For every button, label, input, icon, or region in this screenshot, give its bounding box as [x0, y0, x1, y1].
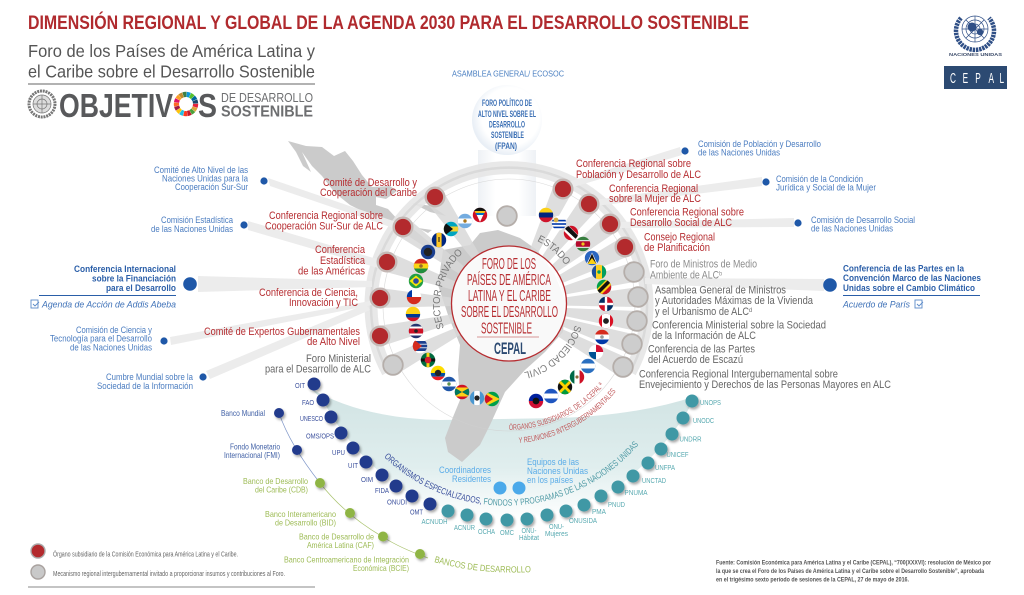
central circle: Foro: SOBRE EL DESARROLLO [461, 304, 558, 321]
right labels: gray: Conferencia de las Partes [648, 344, 755, 356]
central circle: Foro: FORO DE LOS [482, 256, 536, 273]
bank dots [274, 408, 425, 559]
bank labels: Económica (BCIE) [353, 563, 409, 573]
left labels: UN bodies: de las Naciones Unidas [70, 342, 153, 352]
Funds and programmes labels: ONU- [549, 522, 564, 531]
Funds and programmes labels: ACNUDH [422, 517, 448, 526]
right labels: red: Población y Desarrollo de ALC [576, 169, 701, 181]
connector tube to FPAN [478, 150, 536, 216]
bank labels: Banco Mundial [221, 408, 265, 418]
source note: en el trigésimo sexto período de sesiones de la CEPAL, 27 de mayo de 2016. [716, 576, 909, 584]
curved label: Sector privado: SECTOR PRIVADO [433, 250, 462, 330]
FPAN circle [472, 85, 542, 155]
right labels: gray: Conferencia Regional Intergubernamental sobre [639, 368, 838, 380]
outer spokes to UN bodies [170, 147, 824, 379]
flag: Venezuela [538, 208, 554, 222]
Specialised agency labels: OIT [295, 381, 305, 390]
Funds and programmes labels: PMA [592, 507, 607, 516]
Funds and programmes labels: ONUSIDA [569, 516, 598, 525]
flag: Argentina [458, 214, 472, 228]
right labels: UN bodies: Comisión de la Condición [776, 174, 863, 184]
right labels: red: sobre la Mujer de ALC [609, 193, 701, 205]
Funds and programmes labels: ONU- [522, 526, 537, 535]
right labels: gray: Ambiente de ALC [650, 270, 736, 282]
right labels: gray [639, 258, 891, 391]
left labels: red: Cooperación Sur-Sur de ALC [265, 220, 383, 232]
flag: Belice [420, 244, 436, 260]
Coordinadores Residentes: Coordinadores [439, 465, 491, 476]
right labels: gray: d [749, 307, 752, 314]
left labels: UN bodies: de las Naciones Unidas [151, 224, 234, 234]
Specialised agency labels: UPU [332, 448, 345, 457]
left labels: red: Conferencia de Ciencia, [259, 287, 358, 299]
Funds and programmes labels: UNOPS [700, 398, 721, 407]
right labels: gray: y Autoridades Máximas de la Vivienda [655, 295, 814, 307]
callout: Cambio Climático: Unidas sobre el Cambio Climático [843, 283, 975, 294]
left label: Foro Ministerial: para el Desarrollo de ALC [265, 364, 371, 376]
bank labels: del Caribe (CDB) [255, 484, 308, 494]
left labels: red: Cooperación del Caribe [320, 187, 417, 199]
right labels: UN bodies: de las Naciones Unidas [811, 224, 894, 234]
title: DIMENSIÓN REGIONAL Y GLOBAL DE LA AGENDA 2030 PARA EL DESARROLLO SOSTENIBLE [28, 10, 749, 34]
left labels: red: Innovación y TIC [289, 297, 358, 309]
logo: Objetivos de Desarrollo Sostenible [29, 87, 313, 124]
left label: Foro Ministerial: Foro Ministerial [306, 353, 371, 365]
left labels: UN bodies: Comisión Estadística [161, 215, 233, 225]
Funds and programmes labels: UNODC [693, 416, 714, 425]
right labels: red [576, 158, 744, 254]
flag: Perú [598, 314, 614, 328]
Funds and programmes labels: PNUMA [624, 488, 648, 497]
flag: Trinidad y Tabago [564, 226, 578, 240]
left label: Foro Ministerial [265, 353, 371, 376]
right labels: UN bodies [698, 139, 915, 234]
Funds and programmes labels: OCHA [478, 527, 496, 536]
Funds and programmes labels [422, 398, 721, 542]
flag: Guyana [484, 392, 500, 406]
flag: Suriname [576, 236, 590, 252]
Equipos de las Naciones Unidas: Naciones Unidas [527, 466, 588, 477]
bank labels: Fondo Monetario [230, 442, 280, 452]
central circle: Foro [452, 246, 566, 361]
inner spokes to central forum [379, 183, 639, 376]
right labels: red: Conferencia Regional sobre [576, 158, 691, 170]
flag: Guatemala [470, 390, 484, 406]
left labels: red: de Alto Nivel [307, 336, 360, 348]
Funds and programmes labels: Hábitat [519, 533, 540, 542]
left labels: UN bodies: Cumbre Mundial sobre la [106, 372, 193, 382]
Specialised agency labels: FIDA [375, 486, 390, 495]
bank labels: Banco Interamericano [265, 509, 336, 519]
bank labels: Banco de Desarrollo [243, 476, 308, 486]
left labels: red: Estadística [320, 255, 366, 267]
Funds and programmes labels: UNDRR [680, 434, 702, 444]
logo: Objetivos de Desarrollo Sostenible: S [198, 87, 217, 124]
bank labels: América Latina (CAF) [307, 540, 374, 550]
flag: El Salvador [442, 376, 456, 392]
Coordinadores Residentes: Residentes [452, 474, 491, 485]
callout: Financiación para el Desarrollo: para el Desarrollo [106, 283, 176, 294]
right labels: gray: Envejecimiento y Derechos de las Personas Mayores en ALC [639, 379, 891, 391]
flag: Dominica [420, 352, 436, 368]
flag: Bolivia [414, 258, 428, 274]
central circle: Foro: SOSTENIBLE [481, 320, 532, 338]
bank labels: Banco de Desarrollo de [299, 532, 374, 542]
Funds and programmes labels: UNCTAD [642, 476, 666, 485]
Funds and programmes labels: UNICEF [666, 450, 689, 459]
flag: Bahamas [444, 222, 458, 236]
icon: document check [31, 300, 39, 308]
FPAN circle: ALTO NIVEL SOBRE EL [478, 109, 536, 120]
flag: Brasil [408, 274, 424, 288]
Specialised agency labels: OMT [410, 508, 423, 516]
central circle: Foro: LATINA Y EL CARIBE [468, 288, 551, 305]
Coordinadores Residentes [439, 465, 506, 494]
left labels: red: Comité de Expertos Gubernamentales [204, 326, 360, 338]
flag: Honduras [544, 388, 558, 404]
central circle: Foro: CEPAL [494, 339, 526, 358]
logo: Naciones Unidas: NACIONES UNIDAS [949, 52, 1002, 57]
map: Latin America and the Caribbean [288, 141, 565, 462]
left labels: red [204, 177, 417, 348]
flags ring: member countries [405, 207, 614, 409]
flag: Chile [406, 290, 422, 304]
flag: Uruguay [552, 216, 566, 230]
Specialised agency labels: FAO [302, 398, 314, 407]
subtitle: Foro de los Países de América Latina y [28, 41, 315, 61]
callout: Cambio Climático: Acuerdo de París [842, 300, 910, 310]
left labels: UN bodies: Cooperación Sur-Sur [175, 182, 248, 192]
left labels: UN bodies: Tecnología para el Desarrollo [50, 334, 152, 344]
bank labels: de Desarrollo (BID) [275, 518, 336, 528]
curved label: Sociedad civil: SOCIEDAD CIVIL [524, 326, 581, 378]
flag: San Vicente y las Granadinas [592, 264, 606, 280]
Funds and programmes: teal dots [442, 394, 698, 526]
right labels: gray: de la Información de ALC [652, 330, 756, 342]
FPAN circle: (FPAN) [495, 141, 517, 152]
flag: Barbados [432, 232, 446, 248]
band: light teal backdrop [310, 388, 696, 520]
Specialised agency labels: ONUDI [387, 498, 407, 506]
left labels: red: de las Américas [298, 266, 365, 278]
callout: Financiación para el Desarrollo: Conferencia Internacional [74, 264, 176, 275]
right labels: gray: y el Urbanismo de ALC [655, 306, 768, 318]
subtitle [28, 41, 315, 82]
flag: Panamá [588, 344, 604, 360]
flag: Paraguay [594, 330, 610, 344]
flag: Santa Lucía [584, 250, 600, 266]
flag: Colombia [406, 306, 420, 322]
Equipos de las Naciones Unidas: Equipos de las [527, 457, 579, 468]
callout: Cambio Climático: Conferencia de las Partes en la [843, 264, 965, 274]
Specialised agency labels [295, 381, 423, 516]
logo: CEPAL [944, 66, 1007, 89]
flag: Haití [528, 394, 544, 408]
Specialised agency labels: UNESCO [300, 414, 323, 423]
flag: Saint Kitts y Nevis [596, 280, 612, 294]
bank labels: Internacional (FMI) [224, 450, 280, 460]
flag: Nicaragua [580, 358, 596, 374]
curved label: Bancos de desarrollo: BANCOS DE DESARROLLO [434, 556, 530, 573]
flag: Costa Rica [408, 324, 424, 338]
callout: Financiación para el Desarrollo: sobre la Financiación [92, 274, 176, 284]
Specialised agency labels: UIT [348, 461, 358, 470]
callout: Financiación para el Desarrollo: Agenda de Acción de Addis Abeba [41, 300, 176, 310]
right labels: gray: b [719, 270, 722, 278]
development banks arc [279, 413, 428, 558]
curved label: Reuniones intergubernamentales: Y REUNIONES INTERGUBERNAMENTALES [518, 388, 616, 443]
Specialised agencies: navy dots [308, 378, 436, 510]
flag: Antigua y Barbuda [472, 208, 488, 222]
right labels: gray: Asamblea General de Ministros [655, 284, 786, 296]
curved label: Órganos subsidiarios: ÓRGANOS SUBSIDIARIOS, DE LA CEPAL ª [509, 382, 602, 430]
left labels: UN bodies: Comisión de Ciencia y [76, 325, 153, 335]
Specialised agency labels: OIM [361, 475, 373, 484]
flag: México [570, 370, 584, 384]
flag: Jamaica [558, 380, 572, 394]
legend [31, 544, 285, 579]
outer ring band [371, 168, 647, 431]
curved label: Estado: ESTADO [538, 235, 570, 264]
logo: CEPAL: CEPAL [950, 69, 1004, 87]
FPAN circle: FORO POLÍTICO DE [482, 98, 532, 109]
flag: Granada [454, 384, 470, 400]
callout: Financiación para el Desarrollo [31, 264, 176, 310]
legend: Órgano subsidiario de la Comisión Económica para América Latina y el Caribe. [53, 550, 238, 558]
right labels: red: Desarrollo Social de ALC [630, 217, 732, 229]
Funds and programmes labels: PNUD [608, 500, 625, 509]
Equipos de las Naciones Unidas [512, 457, 588, 494]
right labels: gray: Conferencia Ministerial sobre la Sociedad [652, 320, 826, 332]
red subsidiary nodes [371, 180, 634, 345]
subtitle: el Caribe sobre el Desarrollo Sostenible [28, 62, 315, 82]
flag: Cuba [412, 340, 428, 354]
Funds and programmes labels: ACNUR [454, 523, 475, 532]
Specialised agency labels: OMS/OPS [306, 432, 334, 440]
Equipos de las Naciones Unidas: en los países [527, 475, 573, 486]
Funds and programmes labels: UNFPA [655, 463, 676, 472]
left labels: red: Comité de Desarrollo y [323, 177, 417, 189]
FPAN circle: DESARROLLO [489, 120, 525, 130]
curved label: Organismos especializados, fondos y programas: ORGANISMOS ESPECIALIZADOS, FONDOS Y PROGRAMAS DE LAS NACIONES UNIDAS [385, 441, 638, 506]
right labels: UN bodies: de las Naciones Unidas [698, 148, 781, 158]
source note [716, 560, 991, 584]
bank labels: Banco Centroamericano de Integración [284, 554, 409, 564]
left labels: UN bodies: Comité de Alto Nivel de las [154, 165, 249, 175]
flag: Ecuador [430, 366, 446, 380]
left labels: UN bodies: Naciones Unidas para la [162, 174, 248, 184]
left labels: UN bodies: Sociedad de la Información [97, 381, 193, 391]
logo: Objetivos de Desarrollo Sostenible: SOSTENIBLE [221, 104, 313, 120]
logo: Naciones Unidas [949, 16, 1002, 57]
gray intergovernmental nodes [383, 206, 648, 377]
bank labels [221, 408, 409, 573]
left labels: red: Conferencia Regional sobre [269, 210, 383, 222]
right labels: gray: Foro de Ministros de Medio [650, 258, 757, 270]
left labels: red: Conferencia [315, 244, 366, 256]
logo: Objetivos de Desarrollo Sostenible: OBJETIV [59, 87, 173, 124]
FPAN circle: SOSTENIBLE [491, 130, 524, 141]
central circle: Foro: PAÍSES DE AMÉRICA [467, 272, 551, 289]
UN body dots [160, 147, 837, 381]
left labels: UN bodies [50, 165, 249, 391]
right labels: red: Conferencia Regional [609, 183, 698, 195]
right labels: UN bodies: Comisión de Desarrollo Social [811, 215, 915, 225]
icon: document check [915, 300, 923, 308]
Funds and programmes labels: OMC [500, 528, 514, 537]
Funds and programmes labels: Mujeres [545, 529, 568, 538]
callout: Cambio Climático: Convención Marco de las Naciones [843, 273, 981, 284]
logo: Objetivos de Desarrollo Sostenible: DE DESARROLLO [221, 91, 313, 105]
icon: UN emblem small [29, 91, 55, 117]
right labels: UN bodies: Comisión de Población y Desarrollo [698, 139, 821, 149]
legend: Mecanismo regional intergubernamental invitado a proporcionar insumos y contribuciones al Foro. [53, 569, 285, 578]
right labels: red: Conferencia Regional sobre [630, 206, 744, 218]
right labels: red: Consejo Regional [644, 232, 715, 244]
right labels: red: de Planificación [644, 242, 710, 254]
callout: Cambio Climático [842, 264, 981, 310]
flag: República Dominicana [598, 296, 614, 312]
right labels: UN bodies: Jurídica y Social de la Mujer [776, 182, 876, 192]
right labels: gray: del Acuerdo de Escazú [648, 354, 743, 366]
label: Asamblea General / ECOSOC: ASAMBLEA GENERAL/ ECOSOC [452, 68, 564, 78]
